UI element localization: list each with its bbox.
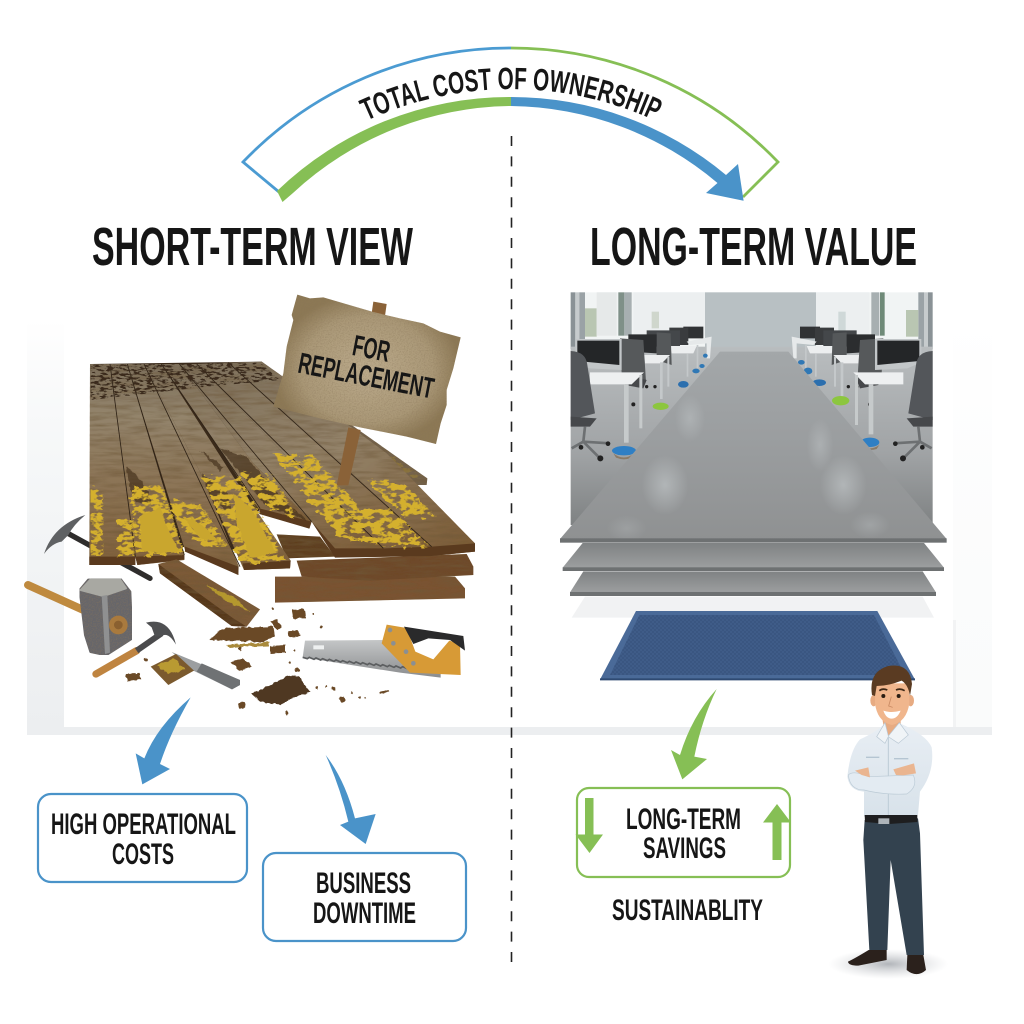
belt <box>865 815 917 824</box>
sign text: REPLACEMENT <box>296 347 437 405</box>
callout: business downtime <box>263 853 466 941</box>
trousers <box>863 818 924 955</box>
arrow: to business downtime <box>326 755 376 844</box>
center dashed divider <box>510 136 512 972</box>
neck <box>882 715 901 740</box>
shoes <box>848 950 926 974</box>
office desks left and right <box>571 327 933 461</box>
plank seams <box>110 363 432 567</box>
shirt <box>847 723 932 817</box>
callout: business downtime: BUSINESS <box>316 867 411 900</box>
wooden floor planks <box>89 362 475 575</box>
walkway floor surface <box>560 352 947 543</box>
icon: hand saw <box>303 625 465 678</box>
heading: short-term view: SHORT-TERM VIEW <box>92 217 413 277</box>
icon: sledgehammer <box>28 579 132 655</box>
dark wear patches <box>127 448 307 520</box>
hands <box>893 763 916 775</box>
stacked planks <box>262 362 473 603</box>
icon: steel square and wood chip <box>151 652 240 689</box>
callout: high operational costs <box>38 794 247 882</box>
label: sustainability: SUSTAINABLITY <box>612 894 763 927</box>
head <box>870 666 914 725</box>
callout: business downtime: DOWNTIME <box>313 897 416 930</box>
arrow: to high operational costs <box>136 697 191 784</box>
callout: long-term savings: LONG-TERM <box>626 803 741 836</box>
stacked floor layers <box>563 543 944 618</box>
sign: for replacement <box>273 295 461 444</box>
wood debris <box>126 608 389 714</box>
sign text: FOR <box>350 329 393 369</box>
fallen plank <box>158 559 260 627</box>
floor underlay <box>90 362 475 553</box>
callout: high operational costs: HIGH OPERATIONAL <box>51 808 236 841</box>
plank front faces <box>89 508 475 575</box>
sign text <box>296 320 442 405</box>
callout: long-term savings <box>576 788 791 877</box>
dark scratched wear at far end <box>91 363 280 400</box>
sign post <box>337 427 361 485</box>
ground shadow <box>828 949 948 979</box>
arc label: TOTAL COST OF OWNERSHIP <box>358 68 662 119</box>
entrance mat <box>600 611 915 680</box>
photo backdrop <box>571 292 933 525</box>
icon: pickaxe <box>44 515 150 578</box>
photo: office with polished floor <box>560 292 947 680</box>
worn yellow paint patches <box>91 453 437 565</box>
solid yellow paint cores <box>140 493 277 558</box>
icon: up arrow <box>763 804 791 860</box>
arrow: to long-term savings <box>671 689 717 779</box>
illustration: damaged wooden floor with tools <box>28 295 475 714</box>
icon: claw hammer <box>96 622 176 674</box>
callout: long-term savings: SAVINGS <box>643 832 726 865</box>
icon: down arrow <box>576 798 603 853</box>
arc banner: total cost of ownership <box>241 46 780 202</box>
callout: high operational costs: COSTS <box>112 838 174 871</box>
person: smiling man with crossed arms <box>828 666 948 979</box>
